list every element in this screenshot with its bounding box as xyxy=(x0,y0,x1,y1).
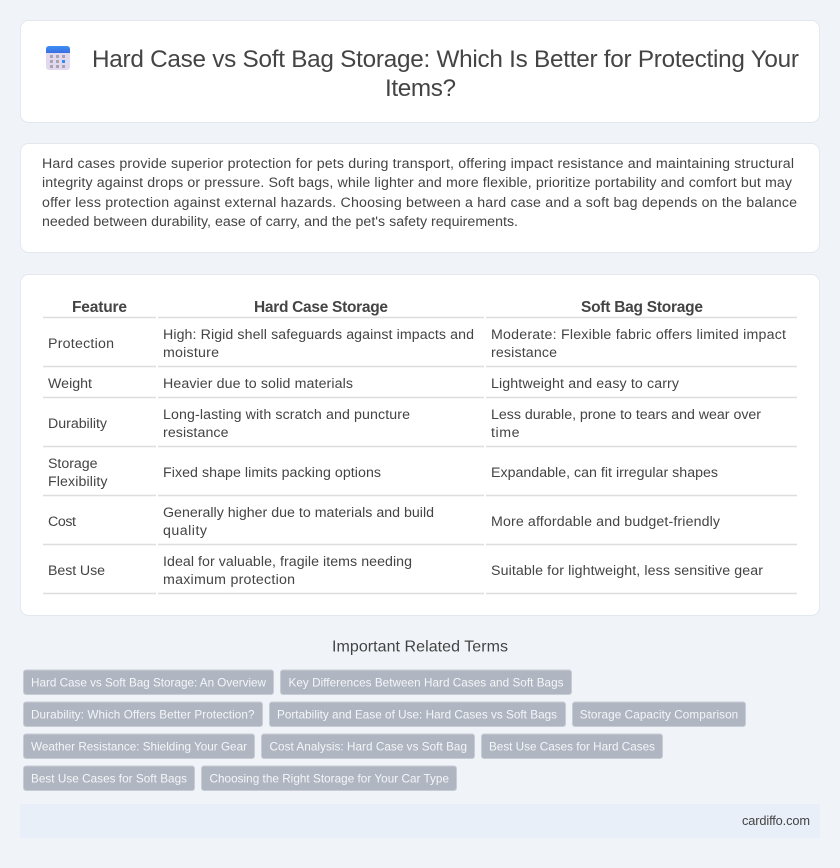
icon: calendar xyxy=(46,46,70,70)
table header row: Hard Case Storage xyxy=(254,299,388,316)
related terms heading: Important Related Terms xyxy=(332,638,508,656)
header panel xyxy=(20,20,820,122)
row: best use xyxy=(48,554,763,588)
intro paragraph: integrity against drops or pressure. Soft bags, while lighter and more flexible, prioritize portability and comfort but may xyxy=(42,175,793,191)
related terms tags: Weather Resistance: Shielding Your Gear xyxy=(31,740,247,754)
row: weight: Heavier due to solid materials xyxy=(163,376,353,392)
intro paragraph: Hard cases provide superior protection for pets during transport, offering impact resistance and maintaining structural xyxy=(42,156,794,172)
related terms tags: Best Use Cases for Soft Bags xyxy=(31,772,187,786)
row: weight: Weight xyxy=(48,376,92,392)
related terms tags: Cost Analysis: Hard Case vs Soft Bag xyxy=(270,740,467,754)
row: protection: resistance xyxy=(491,345,557,361)
row: storage flexibility: Fixed shape limits packing options xyxy=(163,465,381,481)
row: weight xyxy=(48,376,680,392)
row: best use: Ideal for valuable, fragile items needing xyxy=(163,554,412,570)
row: storage flexibility: Storage xyxy=(48,456,98,472)
row: protection: High: Rigid shell safeguards against impacts and xyxy=(163,327,474,343)
row: best use: Best Use xyxy=(48,563,105,579)
related terms tags: Portability and Ease of Use: Hard Cases vs Soft Bags xyxy=(277,708,557,722)
row: cost: More affordable and budget-friendly xyxy=(491,514,721,530)
row: cost xyxy=(48,505,721,539)
title xyxy=(92,46,799,102)
row: storage flexibility: Expandable, can fit irregular shapes xyxy=(491,465,718,481)
table header row xyxy=(72,299,703,316)
row: best use: Suitable for lightweight, less sensitive gear xyxy=(491,563,763,579)
intro paragraph: offer less protection against external hazards. Choosing between a hard case and a soft bag depends on the balance xyxy=(42,195,797,211)
comparison table panel xyxy=(20,274,820,616)
row: storage flexibility xyxy=(48,456,718,490)
footer: cardiffo.com xyxy=(742,813,810,828)
row: cost: quality xyxy=(163,523,208,539)
related terms tags xyxy=(24,670,746,790)
related terms tags: Hard Case vs Soft Bag Storage: An Overview xyxy=(31,676,267,690)
row: cost: Cost xyxy=(48,514,76,530)
row: storage flexibility: Flexibility xyxy=(48,474,108,490)
intro text panel xyxy=(20,144,820,252)
title: Hard Case vs Soft Bag Storage: Which Is Better for Protecting Your xyxy=(92,46,799,73)
related terms tags: Best Use Cases for Hard Cases xyxy=(489,740,655,754)
footer xyxy=(20,804,820,838)
row: best use: maximum protection xyxy=(163,572,295,588)
intro paragraph xyxy=(42,156,797,230)
row: weight: Lightweight and easy to carry xyxy=(491,376,680,392)
row: protection: Moderate: Flexible fabric offers limited impact xyxy=(491,327,786,343)
row: durability: time xyxy=(491,425,520,441)
related terms tags: Choosing the Right Storage for Your Car Type xyxy=(210,772,449,786)
row: durability xyxy=(48,407,761,441)
table header row: Feature xyxy=(72,299,127,316)
row: protection: moisture xyxy=(163,345,219,361)
table header row: Soft Bag Storage xyxy=(581,299,703,316)
row: durability: Long-lasting with scratch and puncture xyxy=(163,407,410,423)
row: cost: Generally higher due to materials and build xyxy=(163,505,434,521)
row: durability: resistance xyxy=(163,425,229,441)
related terms tags: Key Differences Between Hard Cases and Soft Bags xyxy=(288,676,564,690)
related terms tags: Storage Capacity Comparison xyxy=(580,708,738,722)
row: protection: Protection xyxy=(48,336,114,352)
related terms tags: Durability: Which Offers Better Protection? xyxy=(31,708,255,722)
row: protection xyxy=(48,327,786,361)
title: Items? xyxy=(385,75,456,102)
row: durability: Less durable, prone to tears and wear over xyxy=(491,407,761,423)
row: durability: Durability xyxy=(48,416,108,432)
intro paragraph: needed between durability, ease of carry, and the pet's safety requirements. xyxy=(42,214,518,230)
